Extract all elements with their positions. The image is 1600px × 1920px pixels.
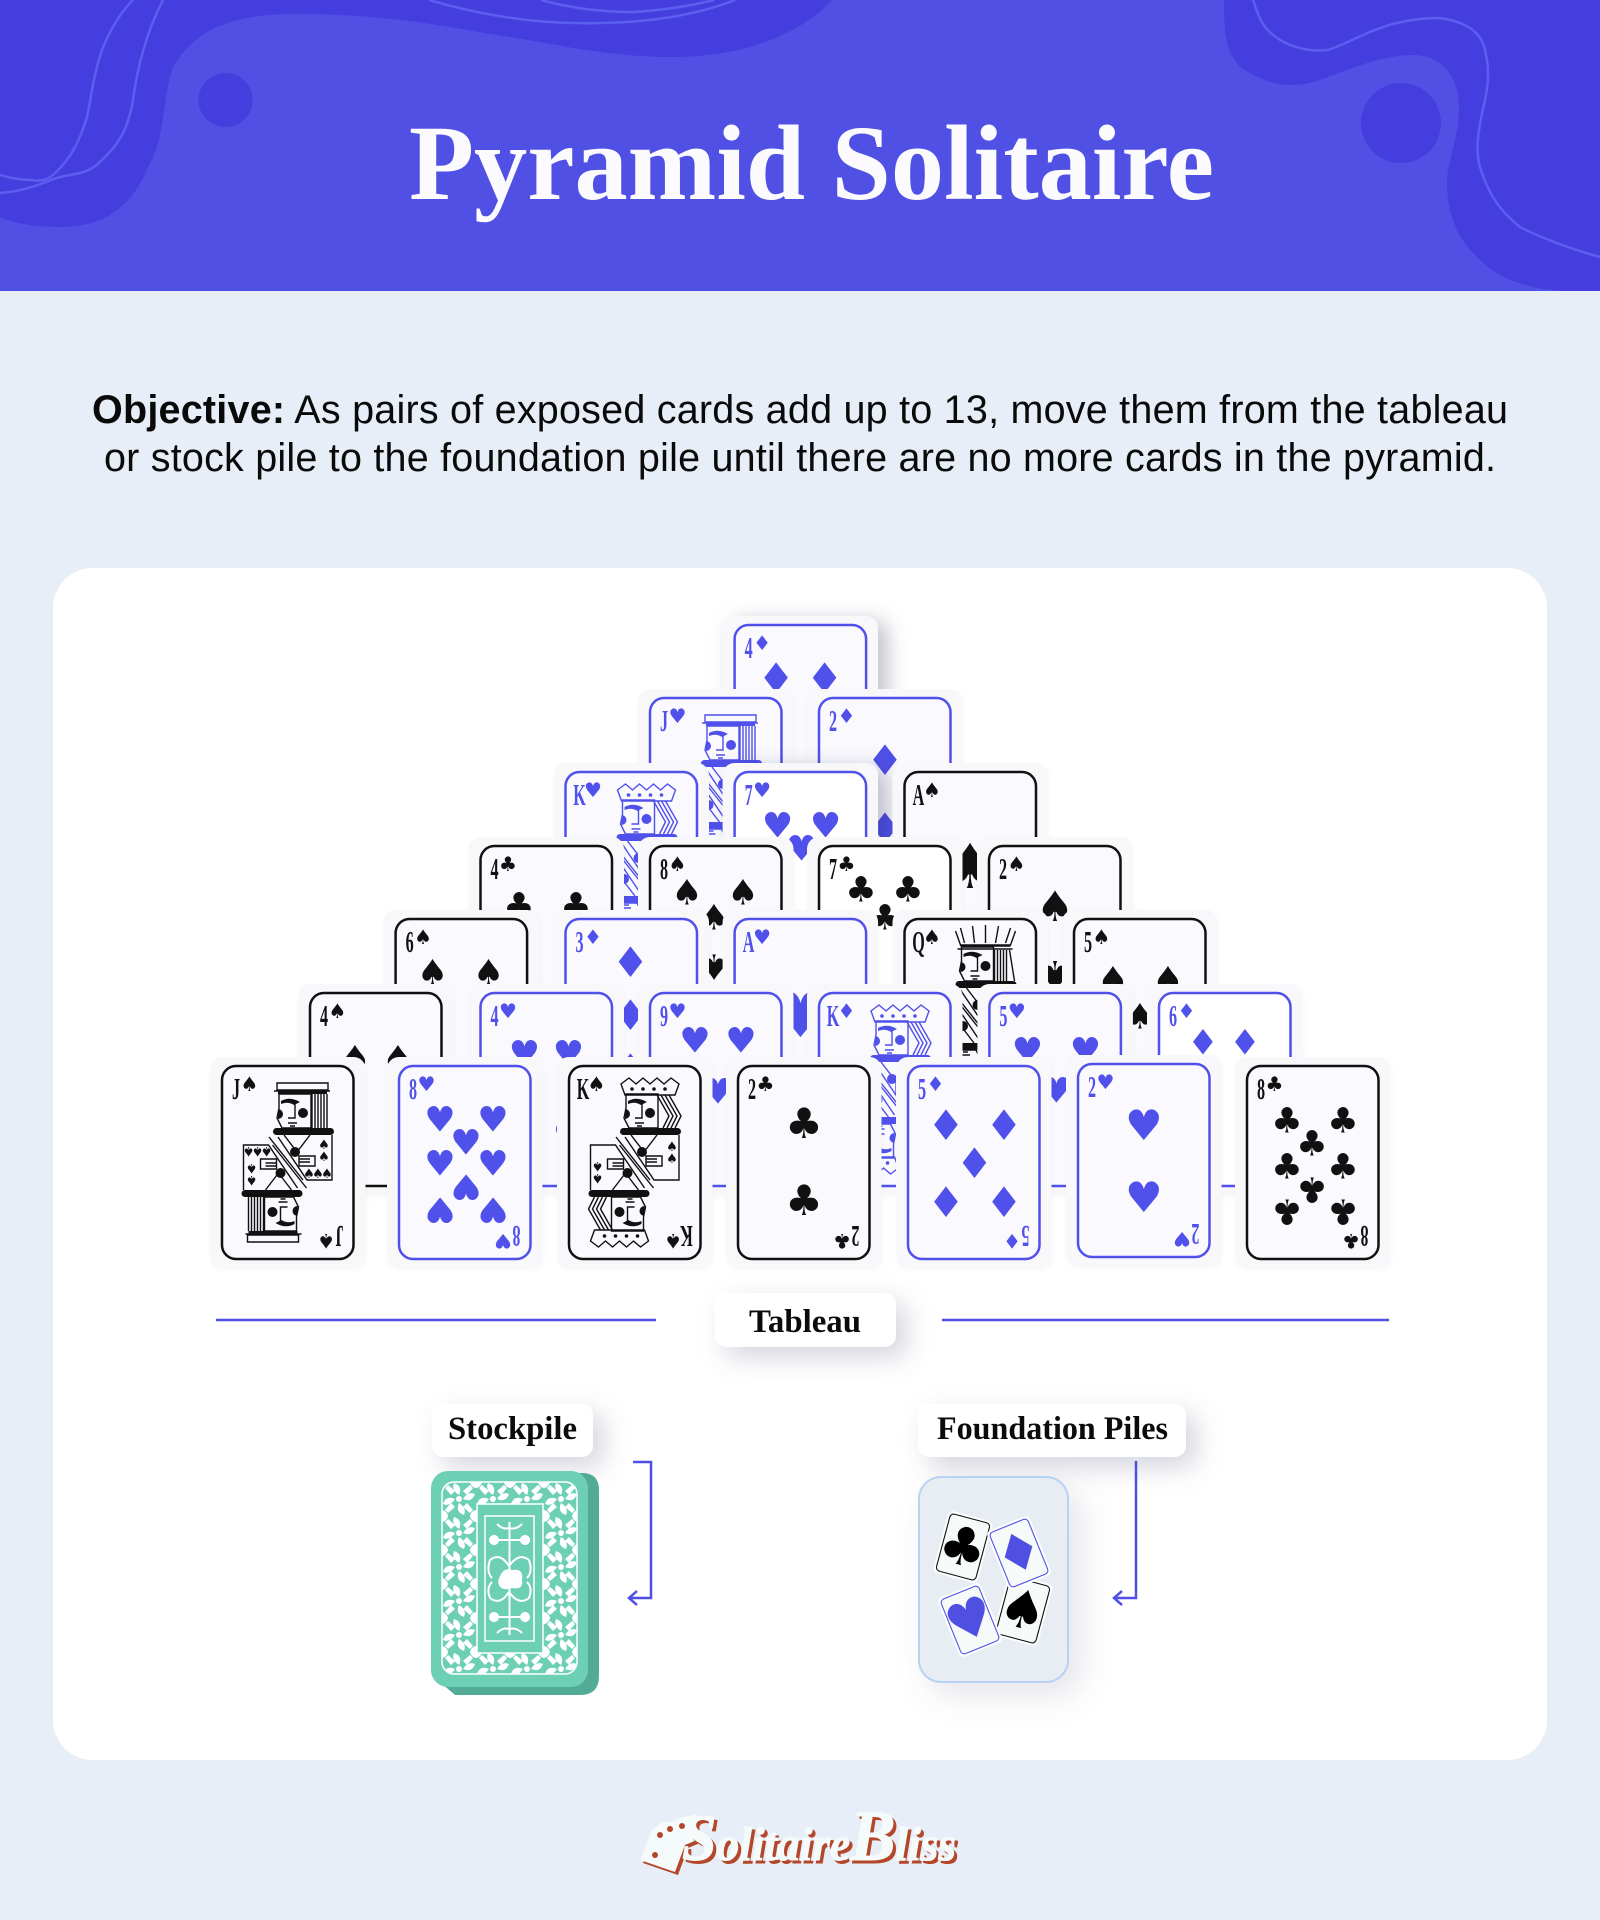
card: king of spades: ♠♠: [592, 1158, 603, 1185]
card: 3 of diamonds: 3: [575, 926, 584, 960]
card: 2 of clubs: ♣: [833, 1229, 851, 1253]
stockpile deck of cards: [431, 1471, 599, 1695]
card: king of spades: K: [577, 1073, 590, 1107]
card: jack of hearts: [638, 689, 794, 900]
card: 2 of clubs: ♣♣: [785, 1099, 823, 1225]
card: 6 of spades: ♠♠: [417, 1038, 504, 1078]
card: 5 of spades: ♠♠♠: [1097, 960, 1184, 1038]
card: ace of hearts: A: [743, 926, 755, 960]
card: 2 of clubs: 2: [851, 1218, 860, 1252]
card: 8 of clubs: ♣: [1342, 1229, 1360, 1253]
card: king of hearts: [554, 763, 709, 974]
title: Pyramid Solitaire: [409, 105, 1214, 223]
card: 2 of diamonds: 2: [829, 705, 837, 739]
card: 4 of hearts: 4: [594, 1145, 602, 1179]
card: 4 of hearts: [468, 984, 624, 1195]
card: 8 of clubs: [1235, 1057, 1390, 1268]
card: 2 of clubs: ♣: [757, 1072, 774, 1096]
card: 2 of spades: ♠: [1008, 852, 1025, 876]
card: 4 of spades: ♠: [329, 999, 346, 1023]
card: 7 of hearts: ♥: [753, 778, 771, 802]
card: queen of spades: Q: [1016, 1071, 1028, 1105]
card: 8 of hearts: 8: [512, 1218, 521, 1252]
card: 8 of spades: 8: [660, 853, 668, 887]
card: 2 of diamonds: ♦: [914, 861, 932, 885]
card: 5 of spades: 5: [1084, 926, 1092, 960]
card: 4 of hearts: ♥: [499, 999, 517, 1023]
card: 5 of hearts: 5: [999, 1000, 1007, 1034]
card: jack of spades: ♠: [241, 1072, 258, 1096]
card: 4 of spades: 4: [423, 1145, 432, 1179]
card: 6 of diamonds: 6: [1169, 1000, 1177, 1034]
card: 9 of hearts: [638, 984, 794, 1195]
tableau divider line right: [942, 1319, 1389, 1321]
card: 4 of clubs: ♣♣: [503, 886, 592, 926]
card: ace of hearts: ♥: [773, 979, 828, 1052]
card: ace of spades: [892, 763, 1048, 974]
card: king of diamonds: K: [827, 1000, 840, 1034]
card: 2 of diamonds: ♦: [838, 704, 855, 728]
card: 3 of diamonds: ♦: [661, 1082, 678, 1106]
card: 4 of diamonds: 4: [745, 632, 753, 666]
objective text: Objective: As pairs of exposed cards add up to 13, move them from the tableau: [92, 388, 1508, 432]
card: 5 of hearts: ♥♥: [1012, 1106, 1101, 1146]
card: 8 of clubs: 8: [1257, 1073, 1265, 1107]
card: 7 of clubs: ♣: [838, 852, 855, 876]
card: ace of hearts: [723, 910, 878, 1121]
card: 6 of diamonds: ♦: [1254, 1156, 1272, 1180]
card: 4 of diamonds: 4: [848, 777, 856, 811]
card: king of diamonds: [807, 984, 962, 1195]
card: 4 of clubs: 4: [490, 853, 499, 887]
card: ace of hearts: ♥: [753, 925, 771, 949]
card: 6 of spades: ♠: [491, 1082, 509, 1106]
card: 7 of clubs: 7: [829, 853, 837, 887]
card: king of hearts: K: [676, 924, 689, 958]
card: 4 of diamonds: [723, 616, 878, 827]
card: 5 of spades: ♠: [1169, 1082, 1187, 1106]
card: 7 of clubs: ♣: [914, 1009, 932, 1033]
card: 8 of clubs: ♣: [1266, 1072, 1283, 1096]
card: king of spades: ♠♠: [666, 1140, 678, 1167]
card: king of diamonds: K: [930, 1145, 943, 1179]
card: 4 of hearts: ♥♥: [509, 1034, 584, 1074]
card: 9 of hearts: ♥♥♥♥: [679, 1088, 757, 1158]
label: foundation piles: [918, 1404, 1186, 1457]
card: 2 of hearts: 2: [1191, 1216, 1200, 1250]
card: 8 of hearts: ♥♥♥: [424, 1166, 509, 1228]
card: 5 of diamonds: ♦: [1003, 1229, 1021, 1253]
card: jack of hearts: J: [763, 850, 772, 884]
label: tableau: Tableau: [749, 1304, 861, 1340]
card: 5 of hearts: ♥: [1008, 999, 1026, 1023]
card: jack of spades: ♠♠♠♠♠: [243, 1143, 272, 1187]
tableau pyramid of cards: [210, 616, 1390, 1268]
card: 3 of diamonds: ♦♦♦: [612, 938, 649, 1094]
card: 4 of spades: [298, 984, 454, 1195]
card: 8 of spades: ♠: [745, 1009, 763, 1033]
mini card: spade: ♠: [992, 1575, 1054, 1646]
card: 6 of diamonds: ♦♦♦♦♦♦: [1187, 1024, 1261, 1158]
card: 4 of clubs: ♣: [576, 1009, 593, 1033]
card: 6 of spades: 6: [406, 926, 414, 960]
card: king of hearts: ♥: [661, 935, 678, 959]
card: 8 of spades: ♠: [669, 852, 686, 876]
card: ace of hearts: ♥: [830, 1082, 848, 1106]
card: 5 of diamonds: ♦♦♦♦♦: [927, 1101, 1023, 1227]
card: king of hearts: K: [573, 779, 586, 813]
mini card: heart: ♥: [937, 1583, 1004, 1658]
arrow: foundation piles: [1114, 1461, 1136, 1605]
label: stockpile: [432, 1404, 593, 1457]
card: 5 of spades: [1062, 910, 1218, 1121]
card: 9 of hearts: ♥: [745, 1156, 763, 1180]
card: 2 of clubs: [726, 1057, 882, 1268]
card: 4 of diamonds: ♦: [830, 788, 848, 812]
card: king of spades: [557, 1057, 712, 1268]
card: 2 of hearts: 2: [1088, 1071, 1096, 1105]
card: queen of spades: ♠: [923, 925, 941, 949]
card: ace of spades: ♠: [923, 778, 941, 802]
card: 5 of spades: ♠♠: [1097, 1030, 1184, 1070]
tableau divider line left: [216, 1319, 656, 1321]
card: 9 of hearts: 9: [763, 1145, 772, 1179]
card: 2 of spades: ♠: [1036, 882, 1074, 931]
card: 2 of spades: ♠: [1084, 1009, 1102, 1033]
card: jack of spades: J: [232, 1073, 240, 1107]
card: 7 of clubs: 7: [932, 998, 941, 1032]
card: 8 of hearts: ♥♥♥♥♥: [424, 1100, 509, 1184]
card: jack of spades: ♠♠♠♠♠: [303, 1138, 333, 1182]
card: 3 of diamonds: [554, 910, 709, 1121]
main white panel: [53, 568, 1547, 1760]
card: 5 of hearts: [977, 984, 1133, 1195]
arrow: stockpile: [629, 1462, 651, 1605]
card: 5 of diamonds: 5: [918, 1073, 926, 1107]
card: 7 of clubs: [807, 837, 962, 1048]
card: 8 of hearts: ♥: [494, 1229, 512, 1253]
card: 4 of spades: ♠♠: [339, 1094, 414, 1134]
card: 8 of hearts: [387, 1057, 542, 1268]
card: 6 of diamonds: 6: [1272, 1145, 1281, 1179]
card: ace of spades: ♠: [1000, 935, 1017, 959]
card: jack of hearts: J: [660, 705, 668, 739]
card: king of spades: ♠: [588, 1072, 605, 1096]
card: 7 of clubs: ♣♣: [845, 970, 924, 1010]
card: 2 of spades: ♠: [1036, 951, 1074, 1000]
card: 2 of diamonds: [807, 689, 962, 900]
card: 4 of clubs: 4: [594, 998, 602, 1032]
header banner: [0, 0, 1600, 291]
logo: Solitaire Bliss: SolitaireBliss: [682, 1796, 956, 1876]
card: 5 of hearts: ♥: [1084, 1156, 1102, 1180]
card: king of spades: K: [680, 1218, 693, 1252]
card: 7 of hearts: 7: [745, 779, 753, 813]
card: jack of spades: J: [335, 1218, 344, 1252]
label: tableau: [715, 1293, 896, 1347]
card: 5 of diamonds: [896, 1057, 1052, 1268]
card: 6 of diamonds: ♦: [1178, 999, 1195, 1023]
card: 8 of clubs: 8: [1360, 1218, 1369, 1252]
card: 7 of hearts: 7: [848, 924, 856, 958]
card: 8 of hearts: ♥: [418, 1072, 435, 1096]
card: 4 of clubs: ♣: [499, 852, 517, 876]
card: 7 of hearts: ♥♥: [762, 894, 841, 934]
objective text: or stock pile to the foundation pile until there are no more cards in the pyramid.: [104, 436, 1496, 480]
card: 4 of diamonds: ♦♦: [757, 740, 843, 789]
card: 7 of hearts: ♥♥♥♥♥: [762, 806, 841, 890]
card: 9 of hearts: ♥: [669, 999, 686, 1023]
card: 6 of spades: ♠: [414, 925, 432, 949]
card: 5 of hearts: ♥♥♥: [1012, 1032, 1101, 1112]
card: 2 of spades: [977, 837, 1132, 1048]
card: ace of hearts: A: [846, 1071, 858, 1105]
card: 4 of spades: ♠♠: [339, 1040, 414, 1080]
mini card: club: ♣: [932, 1512, 994, 1583]
objective text: [92, 388, 1508, 480]
card: 4 of hearts: ♥♥: [509, 1102, 584, 1142]
card: 7 of hearts: [723, 763, 878, 974]
card: jack of hearts: ♥: [745, 861, 763, 885]
card: 2 of hearts: ♥: [1173, 1227, 1191, 1251]
card: 2 of clubs: 2: [748, 1073, 756, 1107]
card: king of hearts: ♥: [584, 778, 602, 802]
card: 2 of hearts: ♥♥: [1125, 1101, 1163, 1222]
card: ace of spades: A: [1016, 924, 1028, 958]
card: jack of spades: [210, 1057, 366, 1268]
card: jack of hearts: ♥: [669, 704, 686, 728]
card: 2 of diamonds: ♦♦: [866, 736, 904, 853]
card: 5 of spades: ♠: [1093, 925, 1110, 949]
card: 9 of hearts: ♥♥♥♥♥: [679, 1022, 757, 1112]
card: 6 of spades: [384, 910, 539, 1121]
card: 6 of spades: 6: [509, 1071, 517, 1105]
card: 2 of diamonds: 2: [932, 850, 941, 884]
card: king of spades: ♠: [664, 1229, 682, 1253]
card: queen of spades: Q: [912, 926, 925, 960]
card: 2 of hearts: ♥: [1097, 1070, 1114, 1094]
card: 4 of hearts: 4: [490, 1000, 499, 1034]
card: 3 of diamonds: 3: [679, 1071, 687, 1105]
label: foundation piles: Foundation Piles: [937, 1411, 1168, 1447]
mini card: diamond: ♦: [986, 1516, 1053, 1591]
card: 2 of spades: 2: [999, 853, 1007, 887]
card: 5 of spades: 5: [1187, 1071, 1196, 1105]
card: 4 of hearts: ♥: [576, 1156, 593, 1180]
card: ace of spades: ♠: [942, 830, 998, 903]
card: king of diamonds: ♦: [914, 1156, 932, 1180]
card: 4 of clubs: ♣♣: [503, 958, 592, 998]
card: king of diamonds: ♦: [838, 999, 855, 1023]
card: 4 of diamonds: ♦♦: [757, 654, 843, 703]
card: 8 of spades: ♠♠♠: [671, 946, 759, 1010]
card: 3 of diamonds: ♦: [584, 925, 602, 949]
card: 8 of hearts: 8: [409, 1073, 417, 1107]
card: 2 of spades: 2: [1102, 998, 1111, 1032]
card: 5 of diamonds: 5: [1021, 1218, 1030, 1252]
card: 7 of hearts: ♥: [830, 935, 848, 959]
card: 7 of clubs: ♣♣♣♣♣: [845, 870, 924, 964]
card: 4 of spades: 4: [320, 1000, 328, 1034]
card: 8 of spades: ♠♠♠♠♠: [671, 874, 759, 964]
card: queen of spades: ♠: [1000, 1082, 1017, 1106]
card: 9 of hearts: 9: [660, 1000, 668, 1034]
card: 5 of diamonds: ♦: [927, 1072, 944, 1096]
card: 8 of clubs: ♣♣♣♣♣: [1271, 1102, 1359, 1188]
card: 8 of clubs: ♣♣♣: [1271, 1168, 1359, 1230]
card: 4 of diamonds: ♦: [753, 631, 771, 655]
card: 8 of spades: 8: [763, 998, 772, 1032]
card: 6 of spades: ♠♠♠♠: [417, 954, 504, 1036]
card: 4 of clubs: [468, 837, 624, 1048]
card: queen of spades: [892, 910, 1048, 1121]
card: 4 of spades: ♠: [405, 1156, 423, 1180]
card: 8 of spades: [638, 837, 794, 1048]
card: jack of spades: ♠: [317, 1229, 335, 1253]
card: ace of spades: A: [913, 779, 924, 813]
card: 2 of hearts: [1066, 1055, 1222, 1266]
label: stockpile: Stockpile: [448, 1411, 577, 1447]
foundation piles tray: [919, 1477, 1068, 1682]
card: 5 of hearts: 5: [1103, 1145, 1111, 1179]
card: 6 of diamonds: [1147, 984, 1302, 1195]
